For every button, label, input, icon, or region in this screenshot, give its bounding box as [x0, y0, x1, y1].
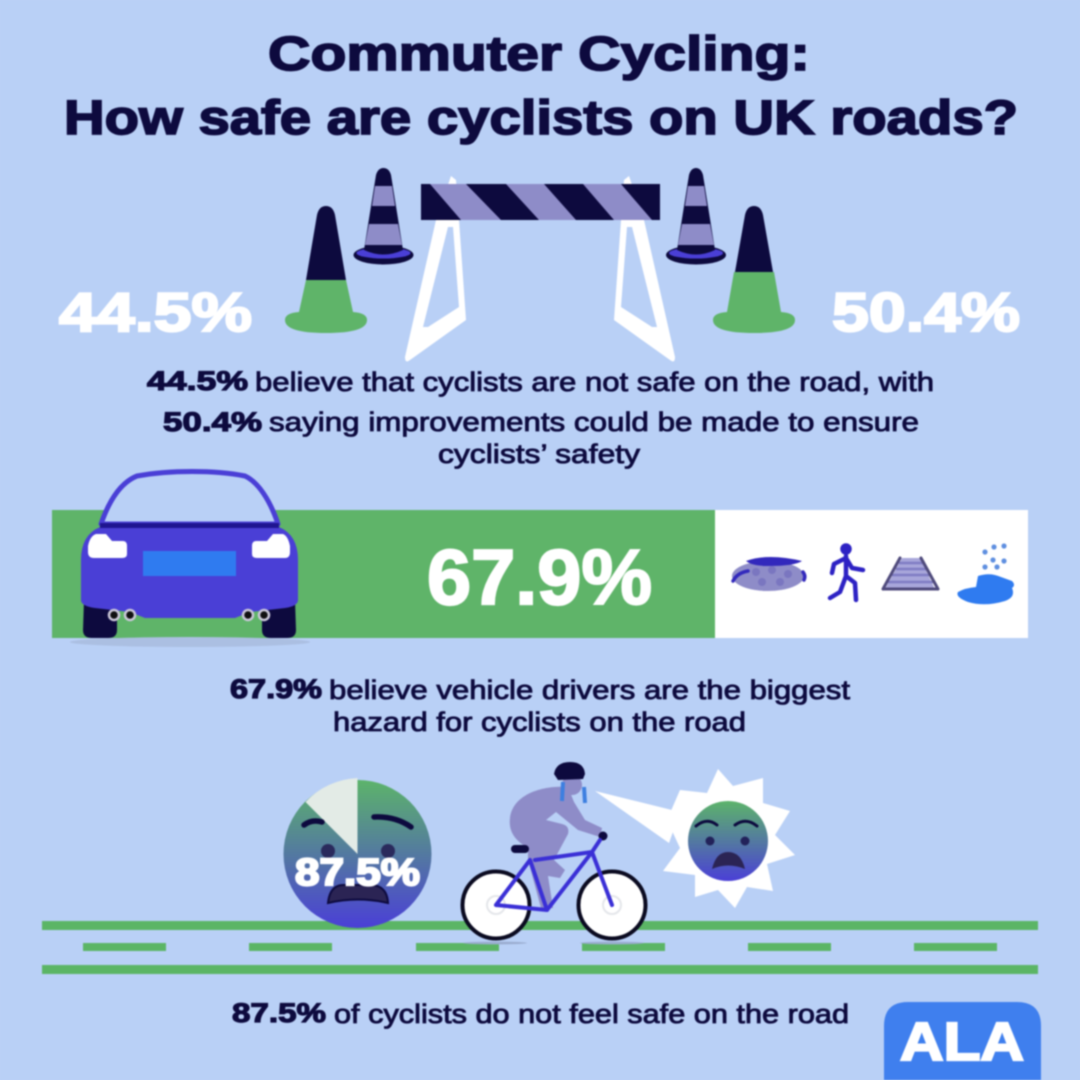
- stat: 44.5%: 44.5%: [59, 281, 252, 343]
- icon: left large cone: [285, 206, 367, 333]
- title: Commuter Cycling:: [268, 28, 810, 81]
- text block: cyclists finding: of cyclists do not feel safe on the road: [334, 999, 849, 1029]
- text block: safety finding: 50.4%: [163, 407, 262, 437]
- title: [64, 28, 1018, 145]
- pie chart: worried face 87.5%: [284, 778, 432, 928]
- icon: railway track: [883, 558, 938, 589]
- icon: left small cone: [354, 168, 414, 264]
- icon: cyclist: [462, 762, 646, 944]
- logo: ALA badge: ALA: [900, 1012, 1024, 1072]
- icon: car: [70, 472, 310, 647]
- text block: cyclists finding: 87.5%: [232, 998, 326, 1028]
- text block: safety finding: saying improvements could be made to ensure: [269, 407, 919, 437]
- text block: safety finding: 44.5%: [147, 366, 248, 396]
- text block: vehicle drivers finding: hazard for cyclists on the road: [333, 707, 746, 737]
- white bar segment: [715, 510, 1028, 638]
- text block: safety finding: [147, 366, 934, 469]
- icon: right small cone: [666, 168, 726, 264]
- panel: hazards bar: [52, 510, 1028, 638]
- icon: road barrier: [405, 176, 675, 361]
- green bar segment: [52, 510, 715, 638]
- title: How safe are cyclists on UK roads?: [64, 92, 1018, 145]
- text block: vehicle drivers finding: [230, 674, 851, 737]
- text block: vehicle drivers finding: believe vehicle drivers are the biggest: [329, 675, 851, 705]
- stat: 50.4%: 50.4%: [832, 281, 1020, 343]
- icon: puddle: [957, 543, 1014, 604]
- icon: pedestrian: [830, 546, 863, 600]
- road: [42, 921, 1038, 974]
- text block: safety finding: cyclists’ safety: [438, 439, 641, 469]
- icon: manhole: [732, 557, 805, 591]
- text block: safety finding: believe that cyclists are not safe on the road, with: [255, 367, 934, 397]
- pie label: 87.5%: [295, 852, 420, 894]
- stat: 67.9%: 67.9%: [427, 533, 652, 621]
- logo: ALA badge: [884, 1002, 1041, 1080]
- text block: vehicle drivers finding: 67.9%: [230, 674, 322, 704]
- icon: speech burst with scared face: [595, 769, 795, 908]
- icon: right large cone: [713, 206, 795, 333]
